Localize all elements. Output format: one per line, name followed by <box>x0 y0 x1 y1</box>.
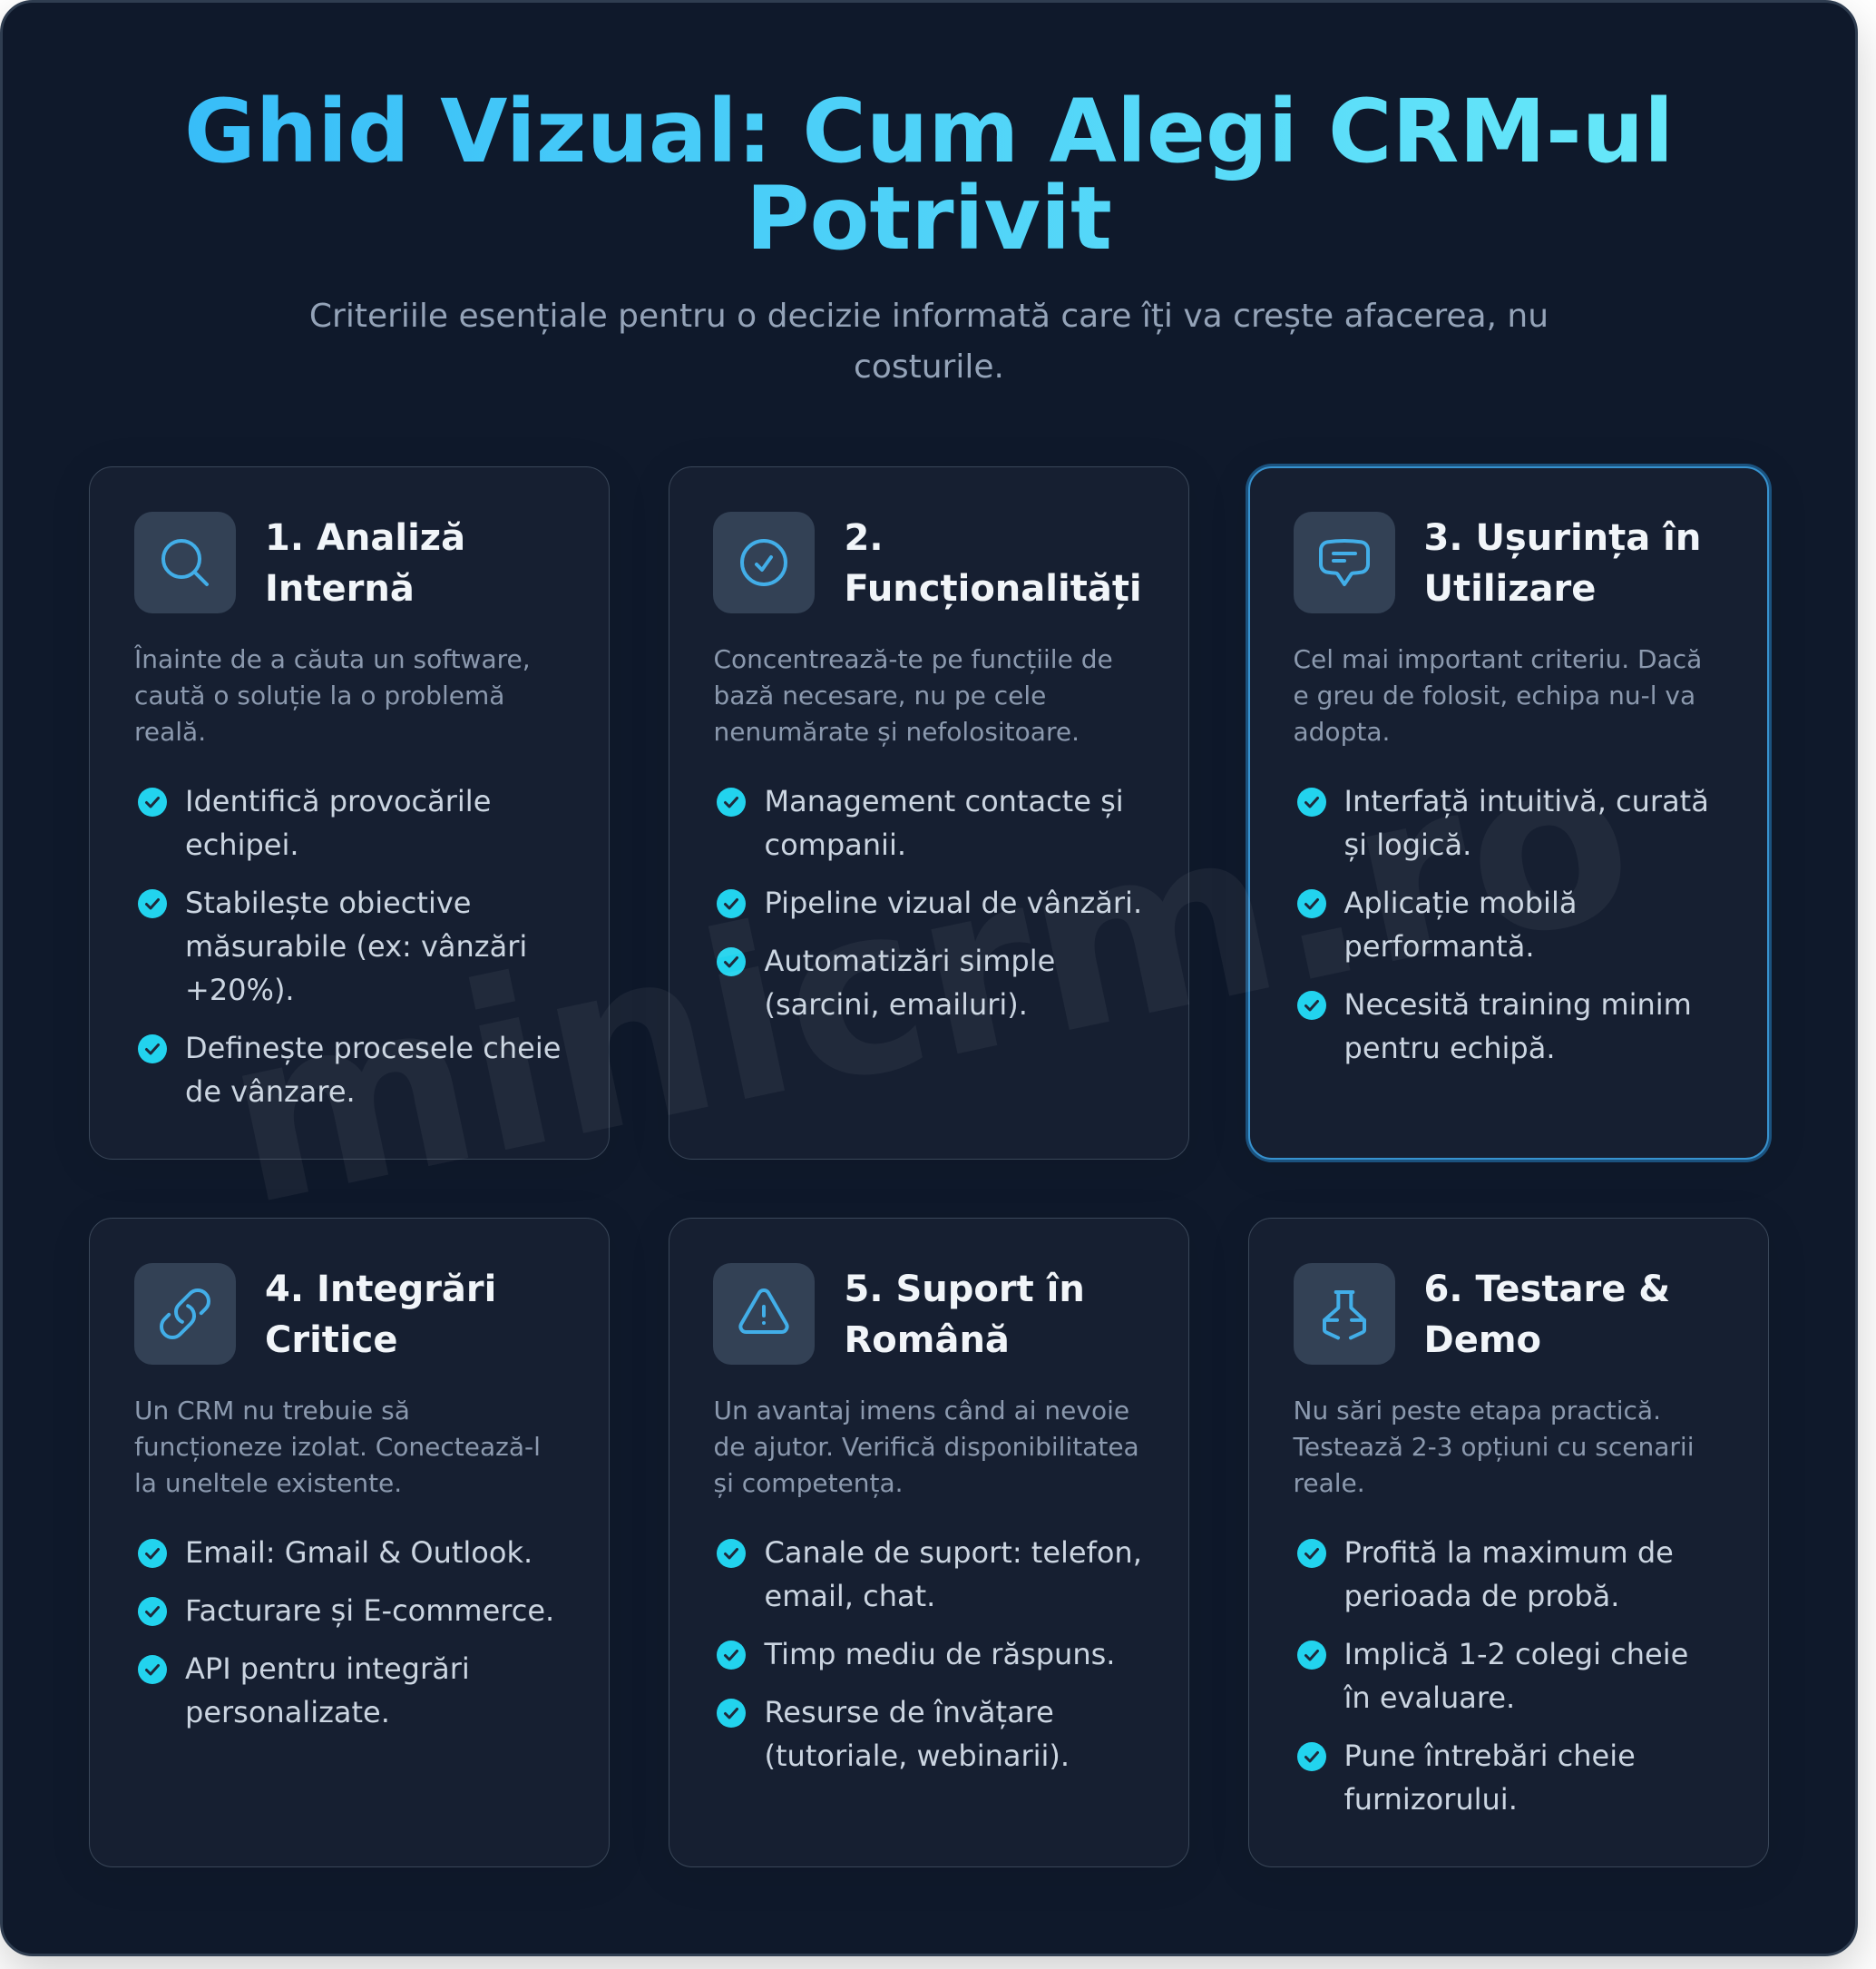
card description: Nu sări peste etapa practică. <box>1294 1396 1661 1425</box>
card heading: 4. Integrări <box>265 1269 496 1310</box>
card description: reale. <box>1294 1468 1365 1498</box>
checklist: furnizorului. <box>1344 1782 1518 1817</box>
card heading: 2. <box>844 517 884 559</box>
card heading <box>265 1269 496 1361</box>
card description <box>134 1396 541 1498</box>
checklist: de vânzare. <box>185 1074 356 1109</box>
card heading: Funcționalități <box>844 568 1142 610</box>
checklist: email, chat. <box>764 1579 935 1613</box>
checklist <box>1297 1535 1688 1817</box>
checklist: Interfață intuitivă, curată <box>1344 784 1709 818</box>
checklist: +20%). <box>185 973 295 1007</box>
checklist: Email: Gmail & Outlook. <box>185 1535 533 1570</box>
checklist: API pentru integrări <box>185 1651 470 1686</box>
panel: card 3 usurinta in utilizare (highlighted) <box>1248 466 1769 1160</box>
card description: bază necesare, nu pe cele <box>713 681 1046 710</box>
card description: Un CRM nu trebuie să <box>134 1396 410 1425</box>
subtitle: Criteriile esențiale pentru o decizie informată care îți va crește afacerea, nu <box>309 298 1549 334</box>
checklist: echipei. <box>185 828 299 862</box>
checklist: (tutoriale, webinarii). <box>764 1739 1070 1773</box>
checklist: în evaluare. <box>1344 1680 1515 1715</box>
title <box>184 81 1674 269</box>
panel: card 5 suport in romana <box>668 1218 1188 1867</box>
icon: magnifying glass <box>134 512 236 613</box>
panel: card 6 testare si demo <box>1248 1218 1769 1867</box>
card description: funcționeze izolat. Conectează-l <box>134 1432 541 1462</box>
card heading <box>1424 517 1701 610</box>
checklist: Facturare și E-commerce. <box>185 1593 554 1628</box>
checklist <box>138 784 561 1109</box>
checklist: personalizate. <box>185 1695 390 1729</box>
card heading <box>844 517 1142 610</box>
card description <box>134 644 531 747</box>
checklist: măsurabile (ex: vânzări <box>185 929 527 964</box>
checklist: Necesită training minim <box>1344 987 1692 1022</box>
checklist <box>1297 784 1709 1065</box>
watermark: minicrm.ro <box>205 698 1653 1259</box>
card heading: Internă <box>265 568 415 610</box>
checklist: companii. <box>764 828 906 862</box>
card heading: Demo <box>1424 1319 1541 1361</box>
title: Potrivit <box>746 168 1112 269</box>
card description: Un avantaj imens când ai nevoie <box>713 1396 1129 1425</box>
checklist: Identifică provocările <box>185 784 491 818</box>
card heading <box>1424 1269 1670 1361</box>
card description: reală. <box>134 717 206 747</box>
checklist: (sarcini, emailuri). <box>764 987 1028 1022</box>
card description <box>713 644 1113 747</box>
panel: card 2 functionalitati <box>668 466 1188 1160</box>
checklist: Canale de suport: telefon, <box>764 1535 1142 1570</box>
card heading: Critice <box>265 1319 397 1361</box>
card heading: Utilizare <box>1424 568 1596 610</box>
checklist: Management contacte și <box>764 784 1124 818</box>
checklist: Timp mediu de răspuns. <box>764 1637 1115 1671</box>
subtitle <box>309 298 1549 385</box>
checklist: pentru echipă. <box>1344 1031 1555 1065</box>
card description: și competența. <box>713 1468 904 1498</box>
checklist: Pipeline vizual de vânzări. <box>764 886 1142 920</box>
checklist: Automatizări simple <box>764 944 1055 978</box>
card description: Înainte de a căuta un software, <box>134 644 531 674</box>
checklist: și logică. <box>1344 828 1471 862</box>
checklist: perioada de probă. <box>1344 1579 1619 1613</box>
checklist: Resurse de învățare <box>764 1695 1054 1729</box>
checklist: Aplicație mobilă <box>1344 886 1577 920</box>
card description <box>713 1396 1139 1498</box>
checklist: Implică 1-2 colegi cheie <box>1344 1637 1688 1671</box>
checklist: performantă. <box>1344 929 1534 964</box>
card description: e greu de folosit, echipa nu-l va <box>1294 681 1695 710</box>
card heading: 5. Suport în <box>844 1269 1085 1310</box>
subtitle: costurile. <box>854 348 1004 385</box>
card description: adopta. <box>1294 717 1390 747</box>
checklist: Definește procesele cheie <box>185 1031 561 1065</box>
card description: nenumărate și nefolositoare. <box>713 717 1080 747</box>
icon: flask <box>1294 1263 1395 1365</box>
card description: Concentrează-te pe funcțiile de <box>713 644 1113 674</box>
panel: card 4 integrari critice <box>89 1218 610 1867</box>
title: Ghid Vizual: Cum Alegi CRM-ul <box>184 81 1674 182</box>
checklist <box>138 1535 554 1729</box>
card heading: 3. Ușurința în <box>1424 517 1701 559</box>
card description: caută o soluție la o problemă <box>134 681 504 710</box>
checklist: Stabilește obiective <box>185 886 471 920</box>
checklist <box>717 1535 1142 1773</box>
checklist: Pune întrebări cheie <box>1344 1739 1636 1773</box>
card description <box>1294 644 1702 747</box>
card heading <box>844 1269 1085 1361</box>
icon: check circle <box>713 512 815 613</box>
card description <box>1293 1396 1694 1498</box>
card description: Testează 2-3 opțiuni cu scenarii <box>1294 1432 1694 1462</box>
card heading: 6. Testare & <box>1424 1269 1670 1310</box>
card description: la uneltele existente. <box>134 1468 402 1498</box>
card heading: Română <box>844 1319 1010 1361</box>
icon: speech bubble <box>1294 512 1395 613</box>
icon: warning triangle <box>713 1263 815 1365</box>
checklist: Profită la maximum de <box>1344 1535 1674 1570</box>
icon: chain link <box>134 1263 236 1365</box>
card heading: 1. Analiză <box>265 517 465 559</box>
card description: de ajutor. Verifică disponibilitatea <box>713 1432 1139 1462</box>
panel: card 1 analiza interna <box>89 466 610 1160</box>
card description: Cel mai important criteriu. Dacă <box>1294 644 1702 674</box>
card heading <box>265 517 465 610</box>
checklist <box>717 784 1142 1022</box>
